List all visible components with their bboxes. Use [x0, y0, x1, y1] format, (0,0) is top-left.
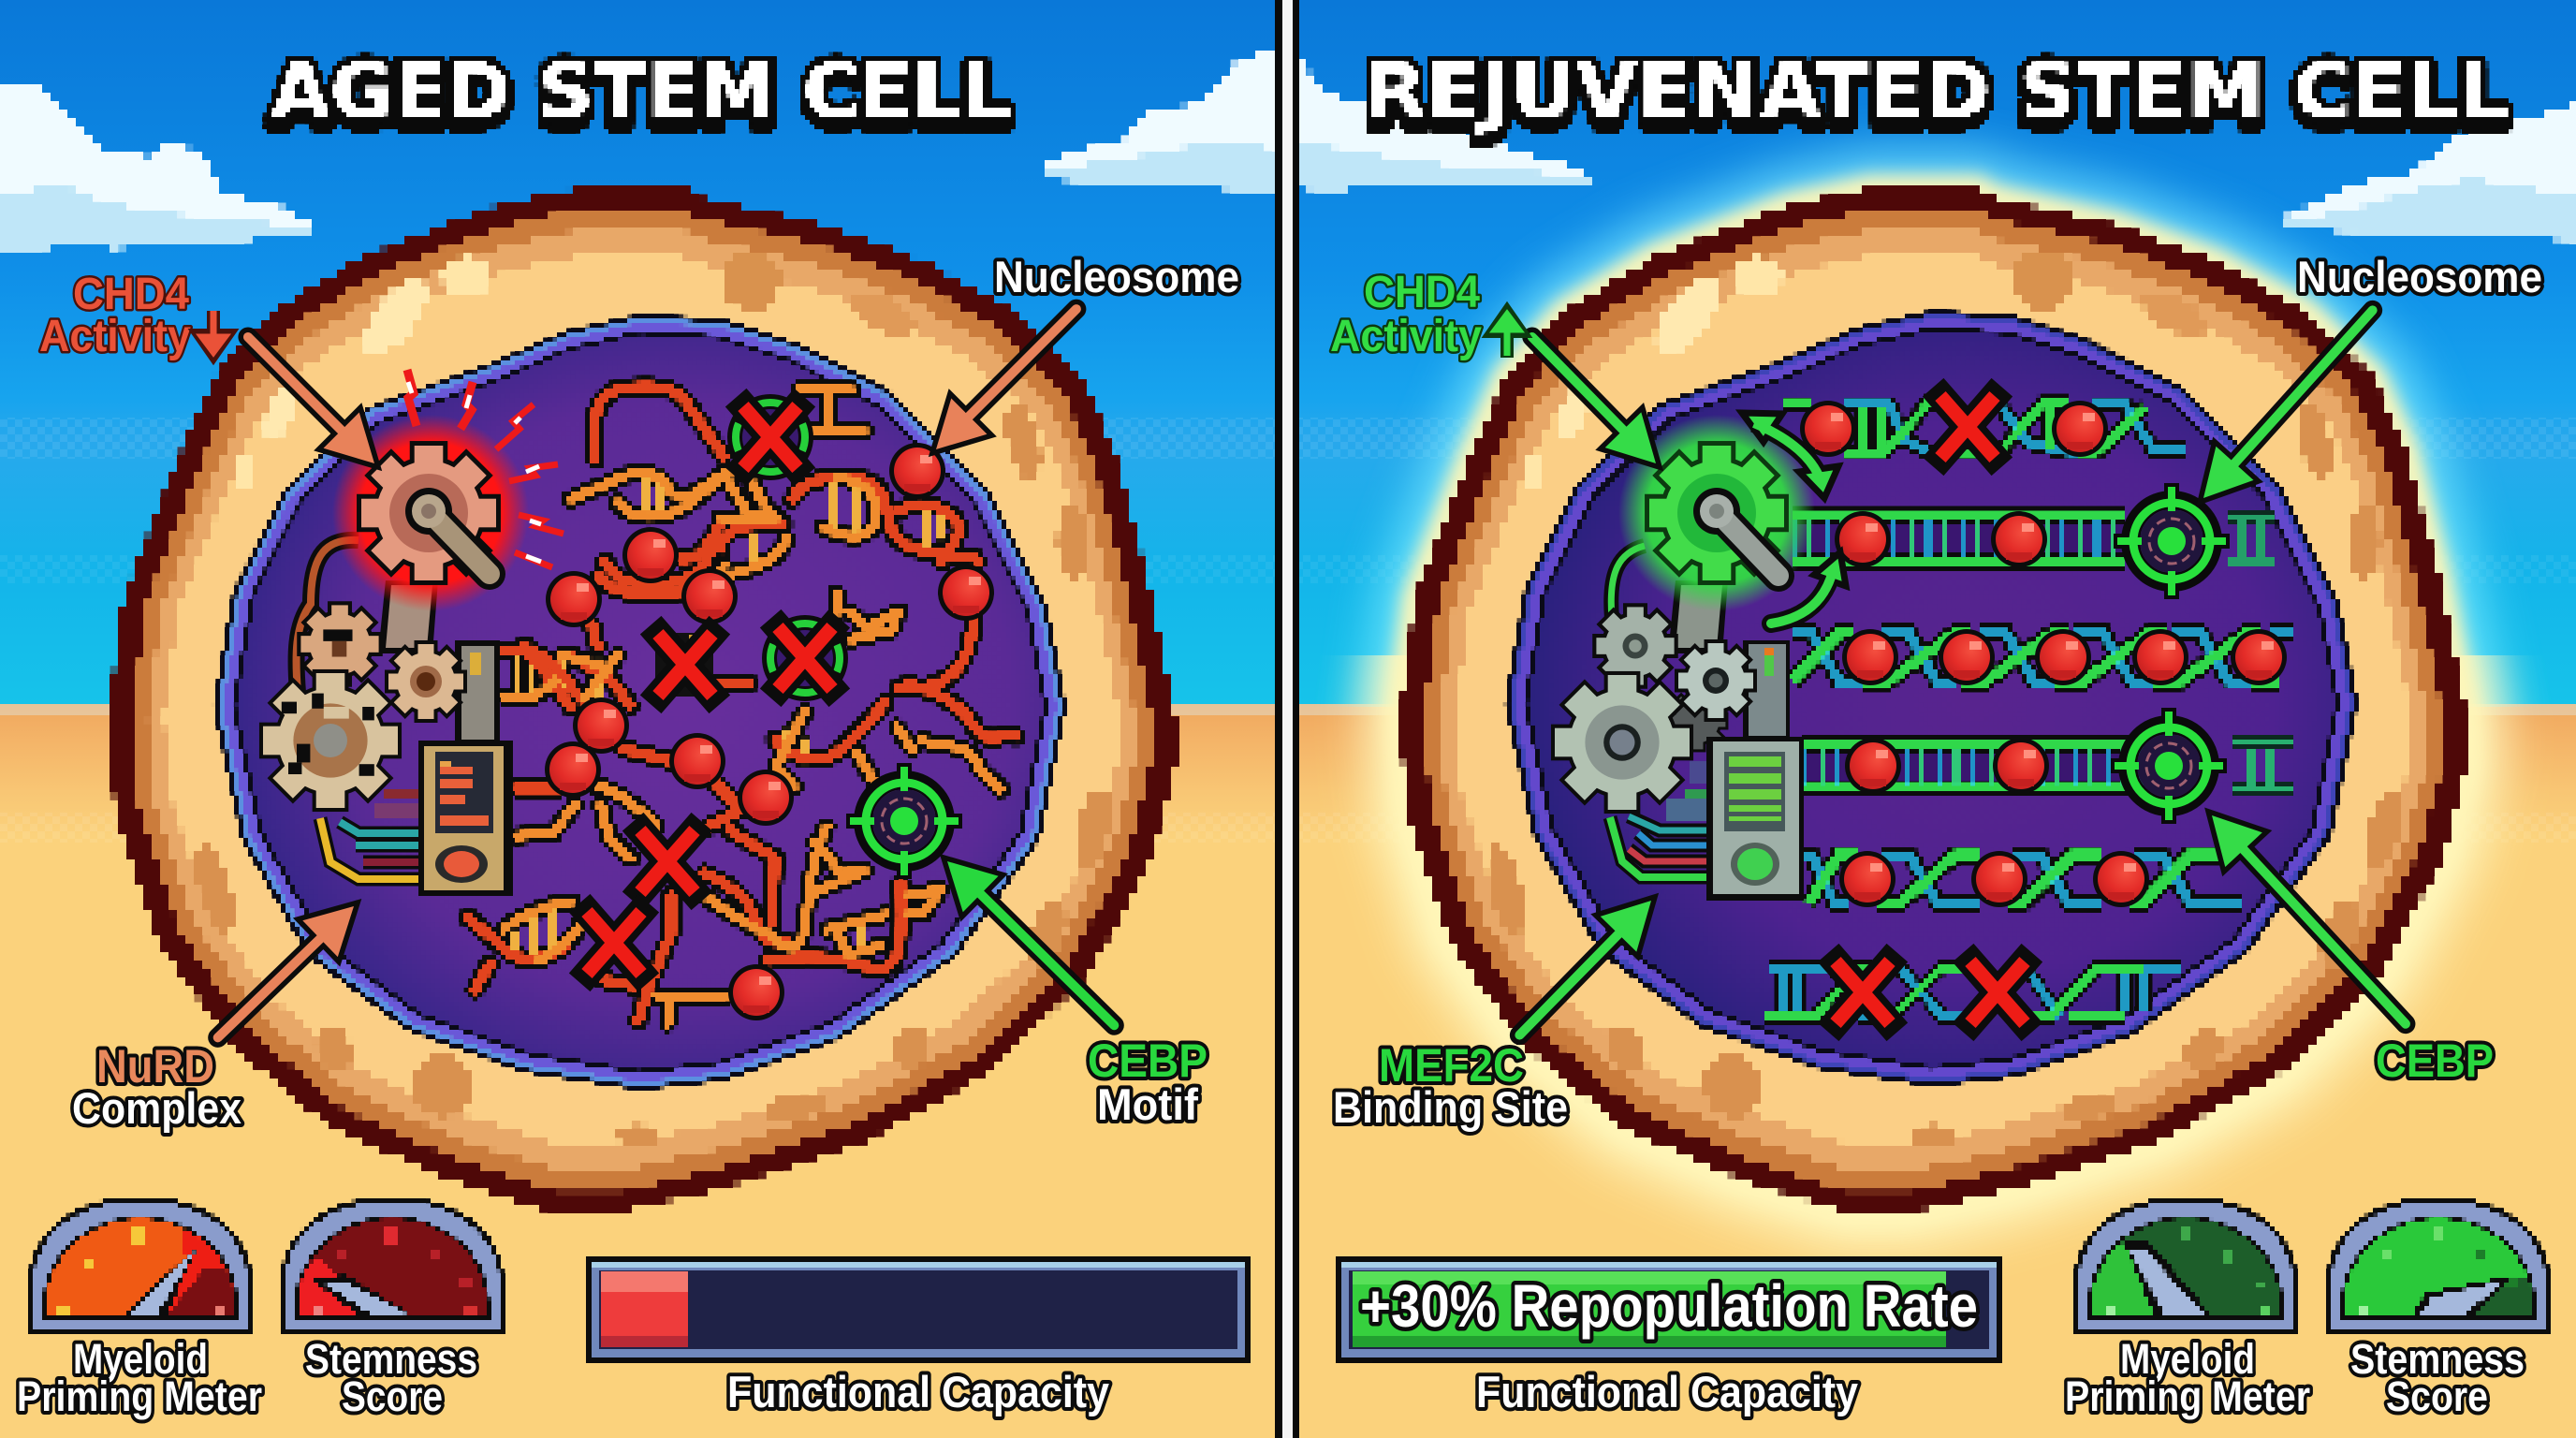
label: CHD4 activity: CHD4	[73, 270, 189, 319]
icon: rusty medium gear	[388, 644, 463, 719]
gauge label: myeloid priming meter: Myeloid	[73, 1335, 208, 1383]
nucleus	[1505, 310, 2358, 1087]
label: CHD4 activity: Activity	[1330, 312, 1482, 361]
arrow: CHD4	[230, 319, 392, 481]
label: functional capacity: Functional Capacity	[727, 1367, 1109, 1416]
CEBP motif target	[846, 763, 962, 879]
icon: medium grey gear	[1678, 643, 1753, 718]
icon: large grey gear	[1555, 675, 1690, 810]
row 5 helix	[1802, 855, 2242, 903]
connector arm	[1668, 580, 1728, 653]
gauge label: myeloid priming meter	[2065, 1335, 2310, 1420]
gauges: rejuvenated	[2073, 1196, 2551, 1336]
label: CEBP motif	[1088, 1034, 1208, 1129]
gauge label: stemness score	[305, 1335, 477, 1420]
NuRD complex machinery	[1555, 415, 1815, 901]
row 1 helix	[1781, 404, 2186, 452]
label: CEBP motif: CEBP	[1088, 1034, 1208, 1087]
cell membrane	[108, 188, 1176, 1212]
functional capacity bar: boosted	[1336, 1256, 2002, 1363]
cell glow	[1399, 188, 2467, 1212]
gauge label: stemness score	[2350, 1335, 2525, 1420]
label: MEF2C binding site: Binding Site	[1333, 1082, 1568, 1132]
nucleosomes	[545, 443, 994, 1020]
wires	[1610, 546, 1713, 877]
label: NuRD complex	[72, 1040, 242, 1133]
label: CHD4 activity	[1330, 268, 1520, 361]
blocked sites: red crosses	[587, 394, 848, 974]
panel: aged stem cell	[0, 48, 1282, 1420]
gauge label: stemness score: Stemness	[2350, 1335, 2525, 1383]
gauge label: myeloid priming meter: Myeloid	[2120, 1335, 2255, 1383]
nucleosomes	[1800, 401, 2287, 907]
NuRD complex machinery	[263, 370, 564, 896]
arrow: nucleosome	[2185, 293, 2392, 515]
icon: rusty small gear	[300, 605, 379, 683]
row 6 helix	[1766, 968, 2181, 1017]
gauges: aged	[28, 1196, 505, 1336]
arrow: CEBP	[2193, 799, 2424, 1041]
row 4 ladder	[1802, 743, 2293, 788]
gauge: myeloid priming high	[28, 1196, 253, 1336]
row 2 ladder	[1791, 517, 2275, 562]
title: aged stem cell: AGED STEM CELL	[271, 48, 1011, 137]
connector arm	[378, 580, 438, 653]
label: CHD4 activity: Activity	[39, 312, 191, 361]
label: nucleosome: Nucleosome	[994, 252, 1239, 301]
arrow: MEF2C	[1501, 883, 1669, 1052]
panel: rejuvenated stem cell	[1300, 48, 2576, 1420]
icon: dark gear	[1669, 693, 1725, 749]
gauge label: stemness score: Score	[342, 1372, 443, 1420]
label: MEF2C binding site: MEF2C	[1379, 1039, 1524, 1092]
arrow: curved double arrow around gear	[1742, 413, 1838, 498]
title: rejuvenated stem cell: REJUVENATED STEM CELL	[1365, 48, 2509, 137]
organized chromatin rows	[1766, 404, 2294, 1017]
label: CEBP motif: Motif	[1097, 1079, 1198, 1129]
side panel	[455, 640, 500, 743]
icon: failing CHD4 gear with red glow	[332, 415, 529, 611]
clouds	[0, 48, 1282, 253]
label: CHD4 activity	[39, 270, 227, 361]
label: CEBP: CEBP	[2376, 1034, 2494, 1087]
label: NuRD complex: Complex	[72, 1083, 242, 1133]
readout device	[418, 741, 513, 896]
nucleus	[213, 314, 1066, 1091]
gauge label: stemness score: Stemness	[305, 1335, 477, 1383]
readout device	[1706, 737, 1804, 901]
label: functional capacity: Functional Capacity	[1476, 1367, 1858, 1416]
sparks	[407, 370, 564, 567]
arrow: CEBP	[929, 844, 1132, 1043]
clouds	[1300, 60, 2576, 241]
gauge: myeloid priming low	[2073, 1196, 2298, 1336]
CEBP and nucleosome targets	[2111, 483, 2230, 824]
gauge label: myeloid priming meter	[17, 1335, 262, 1420]
tangled chromatin	[468, 387, 1016, 1023]
label: NuRD complex: NuRD	[96, 1040, 214, 1093]
side panel	[1743, 640, 1790, 741]
status blocks	[1666, 761, 1709, 821]
gauge: stemness high	[2326, 1196, 2551, 1336]
gauge: stemness low	[280, 1196, 505, 1336]
row 3 helix	[1792, 633, 2294, 682]
value label: repopulation rate: +30% Repopulation Rate	[1360, 1272, 1978, 1340]
icon: small grey gear	[1596, 607, 1675, 685]
gauge label: myeloid priming meter: Priming Meter	[17, 1372, 262, 1420]
wires	[296, 540, 421, 879]
icon: rusty large gear	[263, 673, 398, 808]
arrow: curved arrow to DNA	[1771, 552, 1846, 624]
arrow: CHD4	[1514, 319, 1674, 481]
blocked sites: red crosses	[1836, 396, 2025, 1023]
arrow: NuRD	[200, 888, 372, 1056]
label: CHD4 activity: CHD4	[1364, 268, 1480, 317]
label: nucleosome: Nucleosome	[2297, 252, 2542, 301]
gauge label: myeloid priming meter: Priming Meter	[2065, 1372, 2310, 1420]
functional capacity bar: low	[586, 1256, 1251, 1363]
arrow: nucleosome	[918, 291, 1094, 467]
label: MEF2C binding site	[1333, 1039, 1568, 1132]
icon: active CHD4 gear with green glow	[1618, 415, 1815, 611]
cell membrane	[1399, 188, 2467, 1212]
divider between panels	[1275, 0, 1299, 1438]
gauge label: stemness score: Score	[2386, 1372, 2488, 1420]
